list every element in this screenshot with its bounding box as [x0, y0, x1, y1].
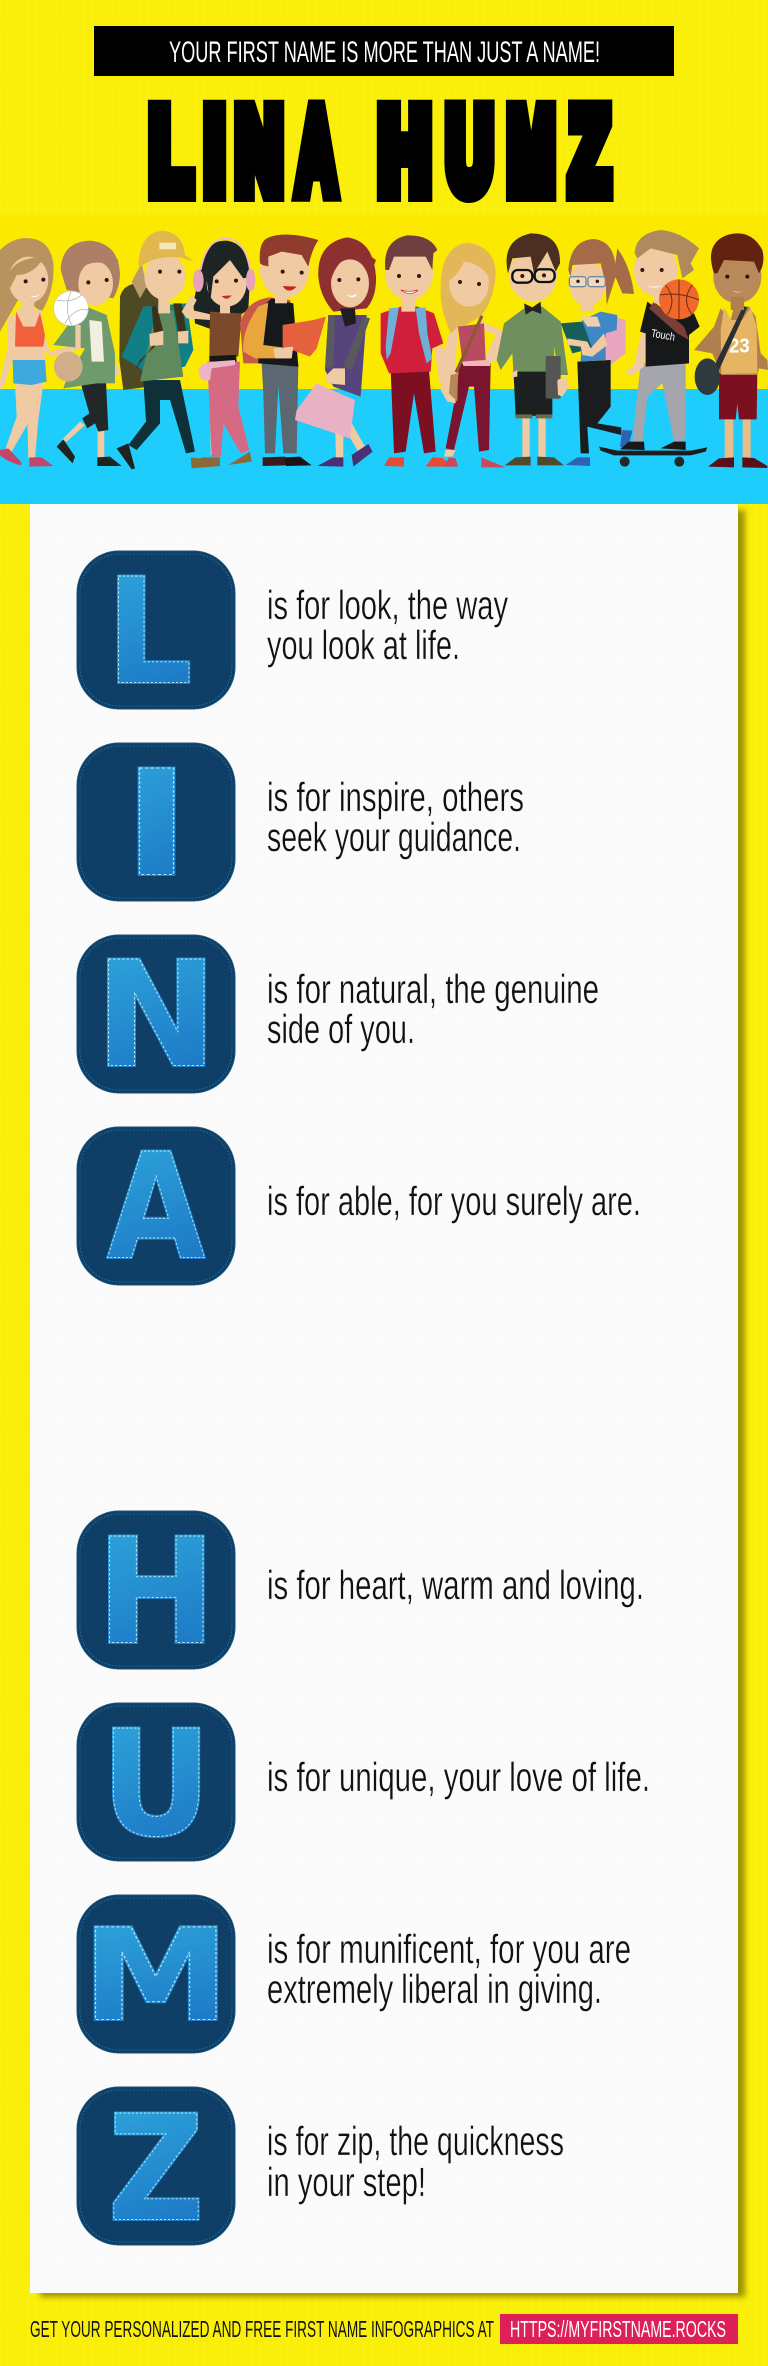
person: girl with volleyball [53, 241, 122, 466]
text: natural [267, 966, 599, 1052]
person: hiker with backpack and cap [117, 231, 220, 469]
row: M [77, 1895, 631, 2053]
letter tile: U: U [101, 1700, 211, 1870]
person: boy reading a book [240, 235, 326, 466]
person: skater with basketball: Touch [650, 328, 676, 344]
letter tile: Z: Z [108, 2084, 204, 2254]
letter tile: A: A [107, 1123, 205, 1293]
title: name: U [447, 86, 492, 215]
text: look: is for look, the way [267, 582, 508, 628]
white content panel [30, 504, 738, 2293]
row: Z [77, 2084, 564, 2254]
text: inspire: seek your guidance. [267, 814, 521, 860]
row: A [77, 1123, 641, 1293]
row: U [77, 1700, 650, 1870]
title: name: L [150, 87, 191, 215]
letter tile: I: I [123, 739, 190, 909]
letter tile: I: I [123, 739, 190, 909]
title: name [150, 86, 609, 216]
title: name: Z [570, 87, 609, 215]
text: look: you look at life. [267, 622, 460, 668]
person: basketball player [694, 233, 768, 468]
text: zip: in your step! [267, 2159, 426, 2205]
text: look [267, 582, 508, 668]
person: skater with basketball [599, 230, 707, 467]
row: I [77, 739, 524, 909]
person: girl with tablet and ponytail [561, 239, 634, 466]
letter tile: U: U [101, 1700, 211, 1870]
letter tile: L [77, 548, 235, 718]
title: name: A [297, 87, 336, 215]
letter tile: N: N [95, 930, 217, 1100]
title: name: I [205, 88, 224, 216]
person: girl with headphones [182, 238, 255, 467]
illustration: group of students [0, 230, 768, 469]
row: L [77, 548, 508, 718]
person: girl with orange top [0, 238, 82, 467]
row: N [77, 930, 599, 1100]
letter tile: H: H [96, 1508, 216, 1678]
text: inspire [267, 774, 524, 860]
letter tile: H: H [96, 1508, 216, 1678]
text: munificent: is for munificent, for you are [267, 1926, 631, 1972]
person: blonde girl with shoulder bag [441, 243, 507, 467]
letter tile: L: L [106, 548, 193, 718]
title: name: M [508, 88, 554, 216]
person: girl with pink case [295, 237, 376, 467]
text: zip [267, 2118, 564, 2205]
letter tile: M: M [82, 1902, 230, 2050]
hero band: blue floor [0, 389, 768, 504]
text: natural: is for natural, the genuine [267, 966, 599, 1012]
title: name: H [379, 88, 430, 216]
text: munificent [267, 1926, 631, 2012]
letter tile: A: A [107, 1123, 205, 1293]
person: boy in red shirt [381, 235, 454, 467]
letter tile: U [77, 1700, 235, 1870]
title: name: N [236, 87, 282, 215]
letter tile: I [77, 739, 235, 909]
right half of group [381, 230, 768, 468]
text: zip: is for zip, the quickness [267, 2118, 564, 2164]
left half of group [0, 231, 376, 469]
text: inspire: is for inspire, others [267, 774, 524, 820]
row: H [77, 1508, 644, 1678]
white panel shadow [40, 510, 745, 2297]
hero band: yellow sky [0, 215, 768, 389]
text: natural: side of you. [267, 1006, 415, 1052]
letter tile: L: L [106, 548, 193, 718]
person: basketball player: 23 [729, 334, 750, 357]
letter tile: M: M [82, 1902, 230, 2050]
letter tile: Z [77, 2084, 235, 2254]
letter tile: N: N [95, 930, 217, 1100]
text: munificent: extremely liberal in giving. [267, 1966, 602, 2012]
letter tile: A [77, 1123, 235, 1293]
person: boy with glasses and green shirt [497, 233, 569, 465]
header banner [94, 26, 674, 76]
letter tile: Z: Z [108, 2084, 204, 2254]
